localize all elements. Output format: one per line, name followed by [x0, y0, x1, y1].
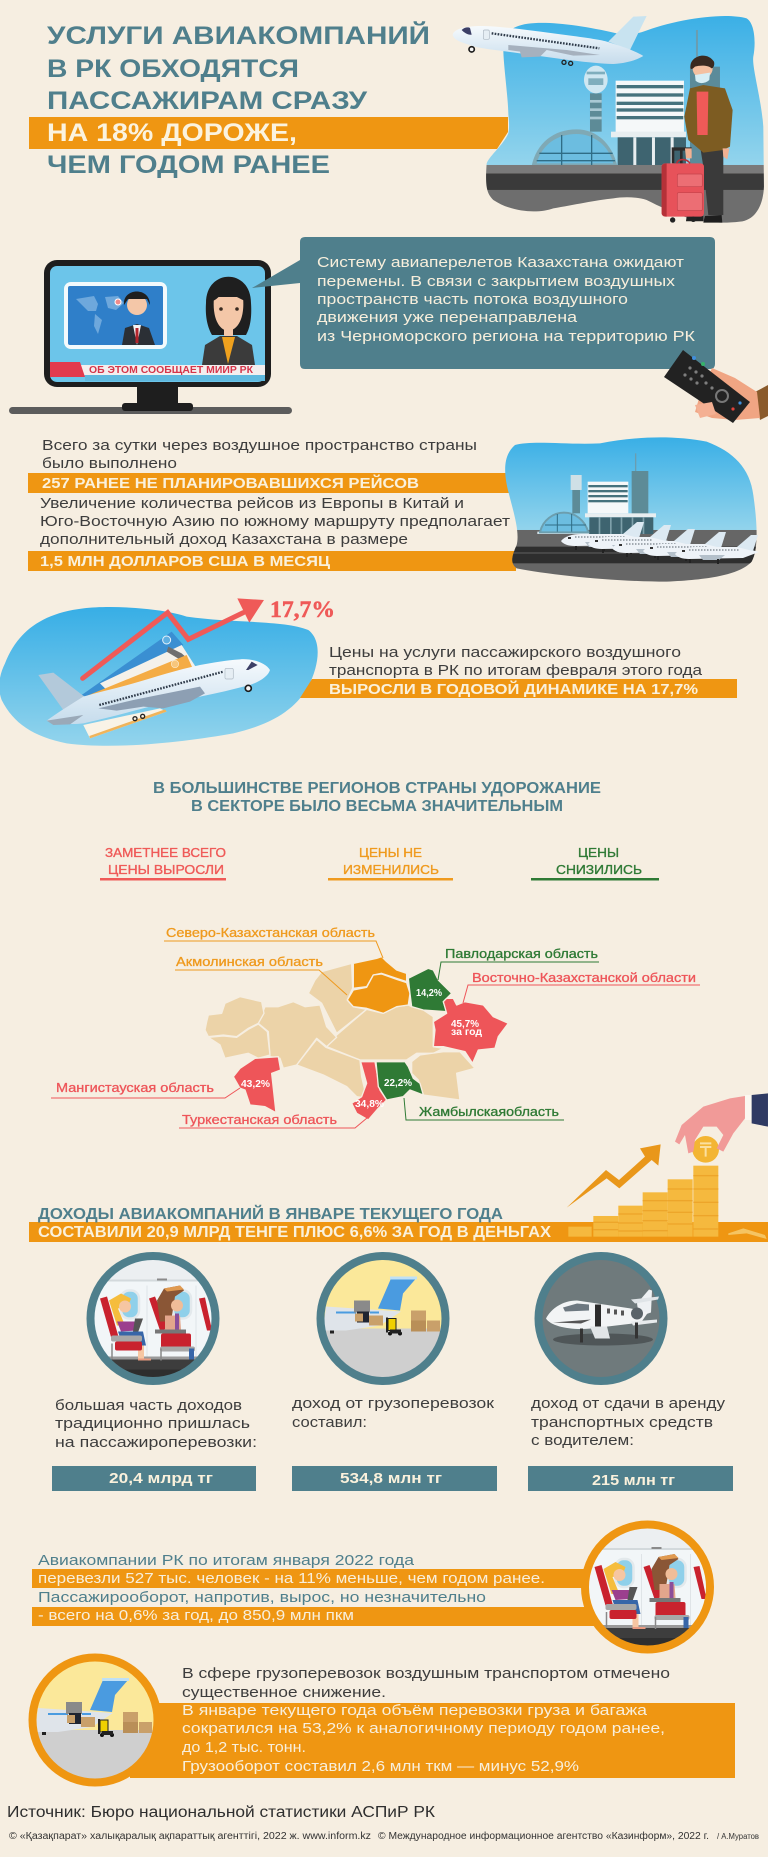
bands — [32, 1569, 592, 1588]
label: Pavlodar: Павлодарская область — [445, 947, 598, 961]
callout: speech bubble — [252, 237, 715, 369]
column: passenger revenue: традиционно пришлась — [55, 1415, 250, 1432]
callout: speech bubble: перемены. В связи с закрытием воздушных — [317, 273, 676, 290]
column: rental revenue: с водителем: — [531, 1432, 634, 1449]
heading: airline revenue: ДОХОДЫ АВИАКОМПАНИЙ В ЯНВАРЕ ТЕКУЩЕГО ГОДА — [38, 1205, 503, 1223]
legend: prices unchanged: ИЗМЕНИЛИСЬ — [343, 863, 439, 877]
text block: cargo decline: сократился на 53,2% к аналогичному периоду годом ранее, — [182, 1720, 665, 1737]
text block: prices — [300, 644, 737, 698]
title — [29, 20, 508, 179]
text block: unplanned flights: Увеличение количества рейсов из Европы в Китай и — [40, 495, 464, 512]
label: North Kazakhstan: Северо-Казахстанская область — [166, 926, 375, 940]
column: passenger revenue: большая часть доходов — [55, 1397, 242, 1414]
label: Zhambyl: Жамбылскаяобласть — [419, 1105, 559, 1119]
label: Turkestan — [179, 1113, 367, 1128]
value box — [52, 1466, 256, 1491]
region values: 34,8% — [355, 1098, 385, 1110]
legend — [100, 846, 659, 880]
icon: cabin in orange ring — [585, 1524, 710, 1650]
text block: cargo decline: существенное снижение. — [182, 1684, 386, 1701]
legend: prices fell: СНИЗИЛИСЬ — [556, 863, 642, 877]
region values: 43,2% — [241, 1078, 271, 1090]
column: cargo revenue — [292, 1256, 497, 1491]
footer credits: / А.Муратов — [717, 1832, 759, 1841]
icon: cabin in teal ring — [90, 1256, 216, 1382]
legend: prices rose most — [100, 846, 226, 880]
illustration: airport with passenger — [453, 10, 768, 227]
title: ЧЕМ ГОДОМ РАНЕЕ — [47, 151, 330, 179]
region values: за год — [451, 1026, 482, 1038]
callout: speech bubble: движения уже перенаправлена — [317, 309, 578, 326]
text block: cargo decline — [130, 1665, 735, 1778]
value box — [528, 1466, 733, 1491]
illustration: plane, tickets and rising arrow — [0, 597, 335, 746]
label: Akmola: Акмолинская область — [176, 955, 323, 969]
region values: 14,2% — [416, 987, 443, 999]
title: ПАССАЖИРАМ СРАЗУ — [47, 87, 368, 115]
text block: cargo decline: до 1,2 тыс. тонн. — [182, 1739, 306, 1756]
callout: speech bubble: из Черноморского региона на территорию РК — [317, 328, 695, 345]
icon: business jet in teal ring — [538, 1256, 664, 1381]
icon: hand with remote — [664, 350, 768, 423]
text block: passengers — [32, 1552, 597, 1626]
plane — [38, 659, 270, 725]
heading: regions — [153, 780, 601, 815]
heading: regions: В БОЛЬШИНСТВЕ РЕГИОНОВ СТРАНЫ УДОРОЖАНИЕ — [153, 780, 601, 797]
label: Zhambyl — [404, 1098, 564, 1120]
band: revenue — [29, 1222, 768, 1242]
column: cargo revenue: составил: — [292, 1414, 367, 1431]
illustration: airport apron with planes — [500, 435, 767, 583]
column: passenger revenue — [52, 1256, 257, 1491]
text block: cargo decline: В сфере грузоперевозок воздушным транспортом отмечено — [182, 1665, 670, 1682]
legend: prices rose most: ЦЕНЫ ВЫРОСЛИ — [108, 863, 224, 877]
legend: prices fell — [531, 846, 659, 880]
label: Mangystau — [51, 1081, 240, 1098]
title: НА 18% ДОРОЖЕ, — [47, 119, 297, 147]
column: rental revenue — [528, 1256, 733, 1491]
footer credits: © Международное информационное агентство «Казинформ», 2022 г. — [378, 1830, 709, 1842]
label: Turkestan: Туркестанская область — [182, 1113, 337, 1127]
icon: passenger in mask — [662, 56, 733, 223]
label: East Kazakhstan — [463, 971, 700, 1003]
label: Akmola — [175, 955, 347, 995]
legend: prices fell: ЦЕНЫ — [578, 846, 619, 860]
column: cargo revenue: доход от грузоперевозок — [292, 1395, 495, 1412]
band — [130, 1703, 735, 1778]
icon: cargo in teal ring — [320, 1256, 446, 1382]
column: rental revenue: транспортных средств — [531, 1414, 713, 1431]
text block: passengers: - всего на 0,6% за год, до 850,9 млн пкм — [38, 1607, 354, 1624]
tickets — [82, 632, 197, 738]
text block: prices: Цены на услуги пассажирского воздушного — [329, 644, 681, 661]
text block: cargo decline: Грузооборот составил 2,6 млн ткм — минус 52,9% — [182, 1758, 579, 1775]
text block: unplanned flights: 257 РАНЕЕ НЕ ПЛАНИРОВАВШИХСЯ РЕЙСОВ — [42, 474, 419, 492]
legend: prices unchanged — [328, 846, 453, 880]
text block: unplanned flights: Юго-Восточную Азию по южному маршруту предполагает — [40, 513, 510, 530]
region values: 22,2% — [384, 1077, 413, 1089]
region values — [241, 987, 482, 1110]
text block: unplanned flights — [28, 437, 516, 571]
source: Источник: Бюро национальной статистики АСПиР РК — [7, 1804, 435, 1821]
text block: passengers: Авиакомпании РК по итогам января 2022 года — [38, 1552, 415, 1569]
icon: airplane in the sky — [453, 16, 647, 65]
text block: passengers: Пассажирооборот, напротив, вырос, но незначительно — [38, 1589, 486, 1606]
heading: airline revenue: СОСТАВИЛИ 20,9 МЛРД ТЕНГЕ ПЛЮС 6,6% ЗА ГОД В ДЕНЬГАХ — [38, 1224, 552, 1241]
legend: prices rose most: ЗАМЕТНЕЕ ВСЕГО — [105, 846, 226, 860]
text block: unplanned flights: было выполнено — [42, 455, 177, 472]
text block: unplanned flights: дополнительный доход Казахстана в размере — [40, 531, 408, 548]
column: passenger revenue: на пассажироперевозки: — [55, 1434, 257, 1451]
text block: unplanned flights: 1,5 МЛН ДОЛЛАРОВ США В МЕСЯЦ — [40, 553, 330, 570]
label: North Kazakhstan — [164, 926, 383, 958]
column: passenger revenue: 20,4 млрд тг — [109, 1470, 213, 1487]
column: rental revenue: доход от сдачи в аренду — [531, 1395, 726, 1412]
title: УСЛУГИ АВИАКОМПАНИЙ — [47, 20, 430, 50]
callout: speech bubble: пространств часть потока воздушного — [317, 291, 628, 308]
icon: cargo in orange ring — [32, 1658, 158, 1783]
legend: prices unchanged: ЦЕНЫ НЕ — [359, 846, 422, 860]
label: Pavlodar — [438, 947, 599, 980]
value: 17.7%: 17,7% — [270, 597, 335, 622]
heading: airline revenue — [29, 1205, 768, 1242]
tv ticker text: ОБ ЭТОМ СООБЩАЕТ МИИР РК — [89, 365, 254, 376]
text block: prices: ВЫРОСЛИ В ГОДОВОЙ ДИНАМИКЕ НА 17,7% — [329, 680, 698, 698]
text block: passengers: перевезли 527 тыс. человек - на 11% меньше, чем годом ранее. — [38, 1570, 545, 1587]
band: 257 flights — [28, 473, 510, 493]
region values: 45,7% — [451, 1018, 480, 1030]
callout: speech bubble: Систему авиаперелетов Казахстана ожидают — [317, 254, 684, 271]
text block: prices: транспорта в РК по итогам февраля этого года — [329, 662, 703, 679]
illustration: coin stacks, hand and arrow — [567, 1093, 768, 1239]
band: 1.5 million — [28, 551, 516, 571]
band: price growth — [300, 679, 737, 698]
arrow — [83, 598, 264, 678]
heading: regions: В СЕКТОРЕ БЫЛО ВЕСЬМА ЗНАЧИТЕЛЬНЫМ — [191, 798, 563, 815]
title highlight band — [29, 117, 508, 149]
column: rental revenue: 215 млн тг — [592, 1472, 675, 1489]
icon: tv news broadcast — [9, 260, 292, 414]
footer credits: © «Қазақпарат» халықаралық ақпараттық агенттігі, 2022 ж. www.inform.kz — [9, 1831, 371, 1842]
column: cargo revenue: 534,8 млн тг — [340, 1470, 442, 1487]
text block: unplanned flights: Всего за сутки через воздушное пространство страны — [42, 437, 477, 454]
label: Mangystau: Мангистауская область — [56, 1081, 214, 1095]
footer credits — [9, 1830, 759, 1842]
text block: cargo decline: В январе текущего года объём перевозки груза и багажа — [182, 1702, 648, 1719]
map: Kazakhstan regions — [51, 926, 700, 1128]
value box — [292, 1466, 497, 1491]
label: East Kazakhstan: Восточно-Казахстанской области — [472, 971, 696, 985]
title: В РК ОБХОДЯТСЯ — [47, 55, 299, 83]
